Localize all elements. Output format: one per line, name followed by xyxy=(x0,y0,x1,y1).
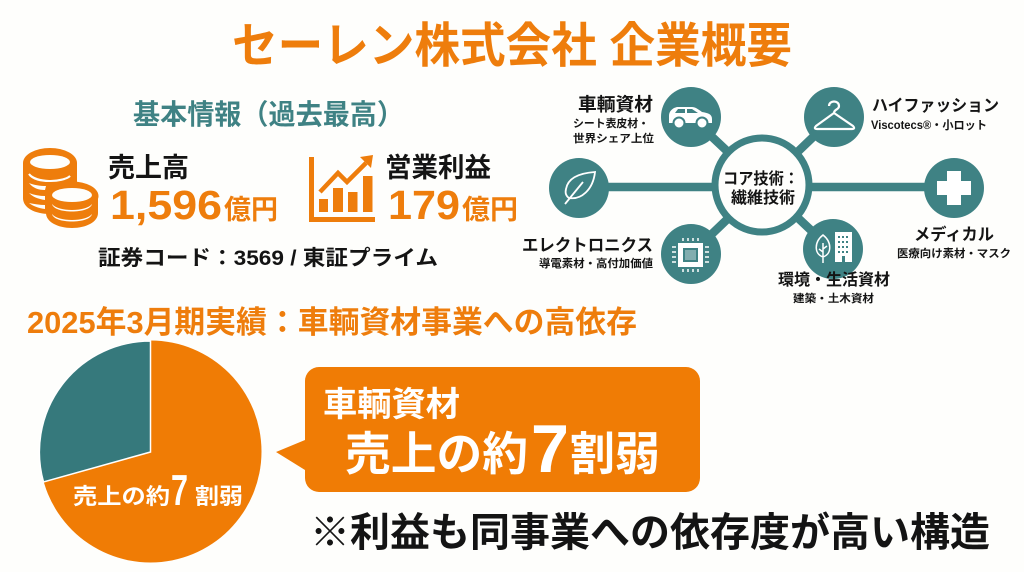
heading: basic info: 基本情報（過去最高） xyxy=(133,99,404,130)
icon: hanger xyxy=(804,87,864,147)
callout value: 割弱 xyxy=(570,428,660,480)
label: operating profit: 営業利益 xyxy=(385,153,491,183)
value: sales: 億円 xyxy=(224,195,278,225)
heading: FY2025 results: 2025年3月期実績：車輌資材事業への高依存 xyxy=(27,305,637,340)
label: medical xyxy=(897,224,1011,260)
icon: growth chart xyxy=(309,155,375,222)
label: vehicle materials: 車輌資材 xyxy=(578,94,653,115)
label: medical: メディカル xyxy=(914,224,994,244)
value: operating profit: 億円 xyxy=(462,195,518,225)
label: electronics: エレクトロニクス xyxy=(522,236,653,255)
callout value xyxy=(345,411,660,487)
pie label: 割弱 xyxy=(195,484,243,509)
diagram: core technology network xyxy=(522,87,1011,305)
value: sales: 1,596 xyxy=(110,182,222,228)
label: high fashion: ハイファッション xyxy=(872,97,999,115)
label: electronics xyxy=(522,236,653,270)
label: vehicle materials xyxy=(573,94,654,145)
label: high fashion xyxy=(871,97,999,132)
pie chart xyxy=(39,340,262,562)
icon: chip xyxy=(661,224,721,284)
callout value: 売上の約 xyxy=(345,428,528,480)
label: electronics: 導電素材・高付加価値 xyxy=(539,256,653,270)
value: sales xyxy=(110,182,278,228)
pie label: 売上の約 xyxy=(73,484,170,509)
icon: leaf and building xyxy=(803,219,863,279)
pie label: 7 xyxy=(171,466,188,515)
securities code: 証券コード：3569 / 東証プライム xyxy=(98,247,438,270)
note: ※利益も同事業への依存度が高い構造 xyxy=(310,511,990,555)
pie label xyxy=(73,466,243,515)
core circle: コア技術： xyxy=(723,169,799,188)
core circle: 繊維技術 xyxy=(731,188,795,207)
icon: medical cross xyxy=(924,158,984,218)
title: セーレン株式会社 企業概要 xyxy=(232,20,792,73)
label: high fashion: Viscotecs®・小ロット xyxy=(871,119,987,132)
core circle xyxy=(715,138,809,232)
label: environment materials: 建築・土木資材 xyxy=(793,291,874,305)
icon: coins xyxy=(23,148,98,228)
value: operating profit: 179 xyxy=(388,182,460,228)
label: environment materials xyxy=(778,270,890,305)
callout value: 7 xyxy=(531,411,569,487)
label: sales: 売上高 xyxy=(108,153,189,183)
callout xyxy=(276,367,700,492)
label: vehicle materials: 世界シェア上位 xyxy=(573,131,654,145)
icon: car xyxy=(661,87,721,147)
label: medical: 医療向け素材・マスク xyxy=(897,246,1011,260)
callout heading: 車輌資材 xyxy=(323,386,460,424)
label: vehicle materials: シート表皮材・ xyxy=(573,116,649,130)
label: environment materials: 環境・生活資材 xyxy=(778,270,890,289)
value: operating profit xyxy=(388,182,518,228)
icon: leaf xyxy=(549,158,609,218)
